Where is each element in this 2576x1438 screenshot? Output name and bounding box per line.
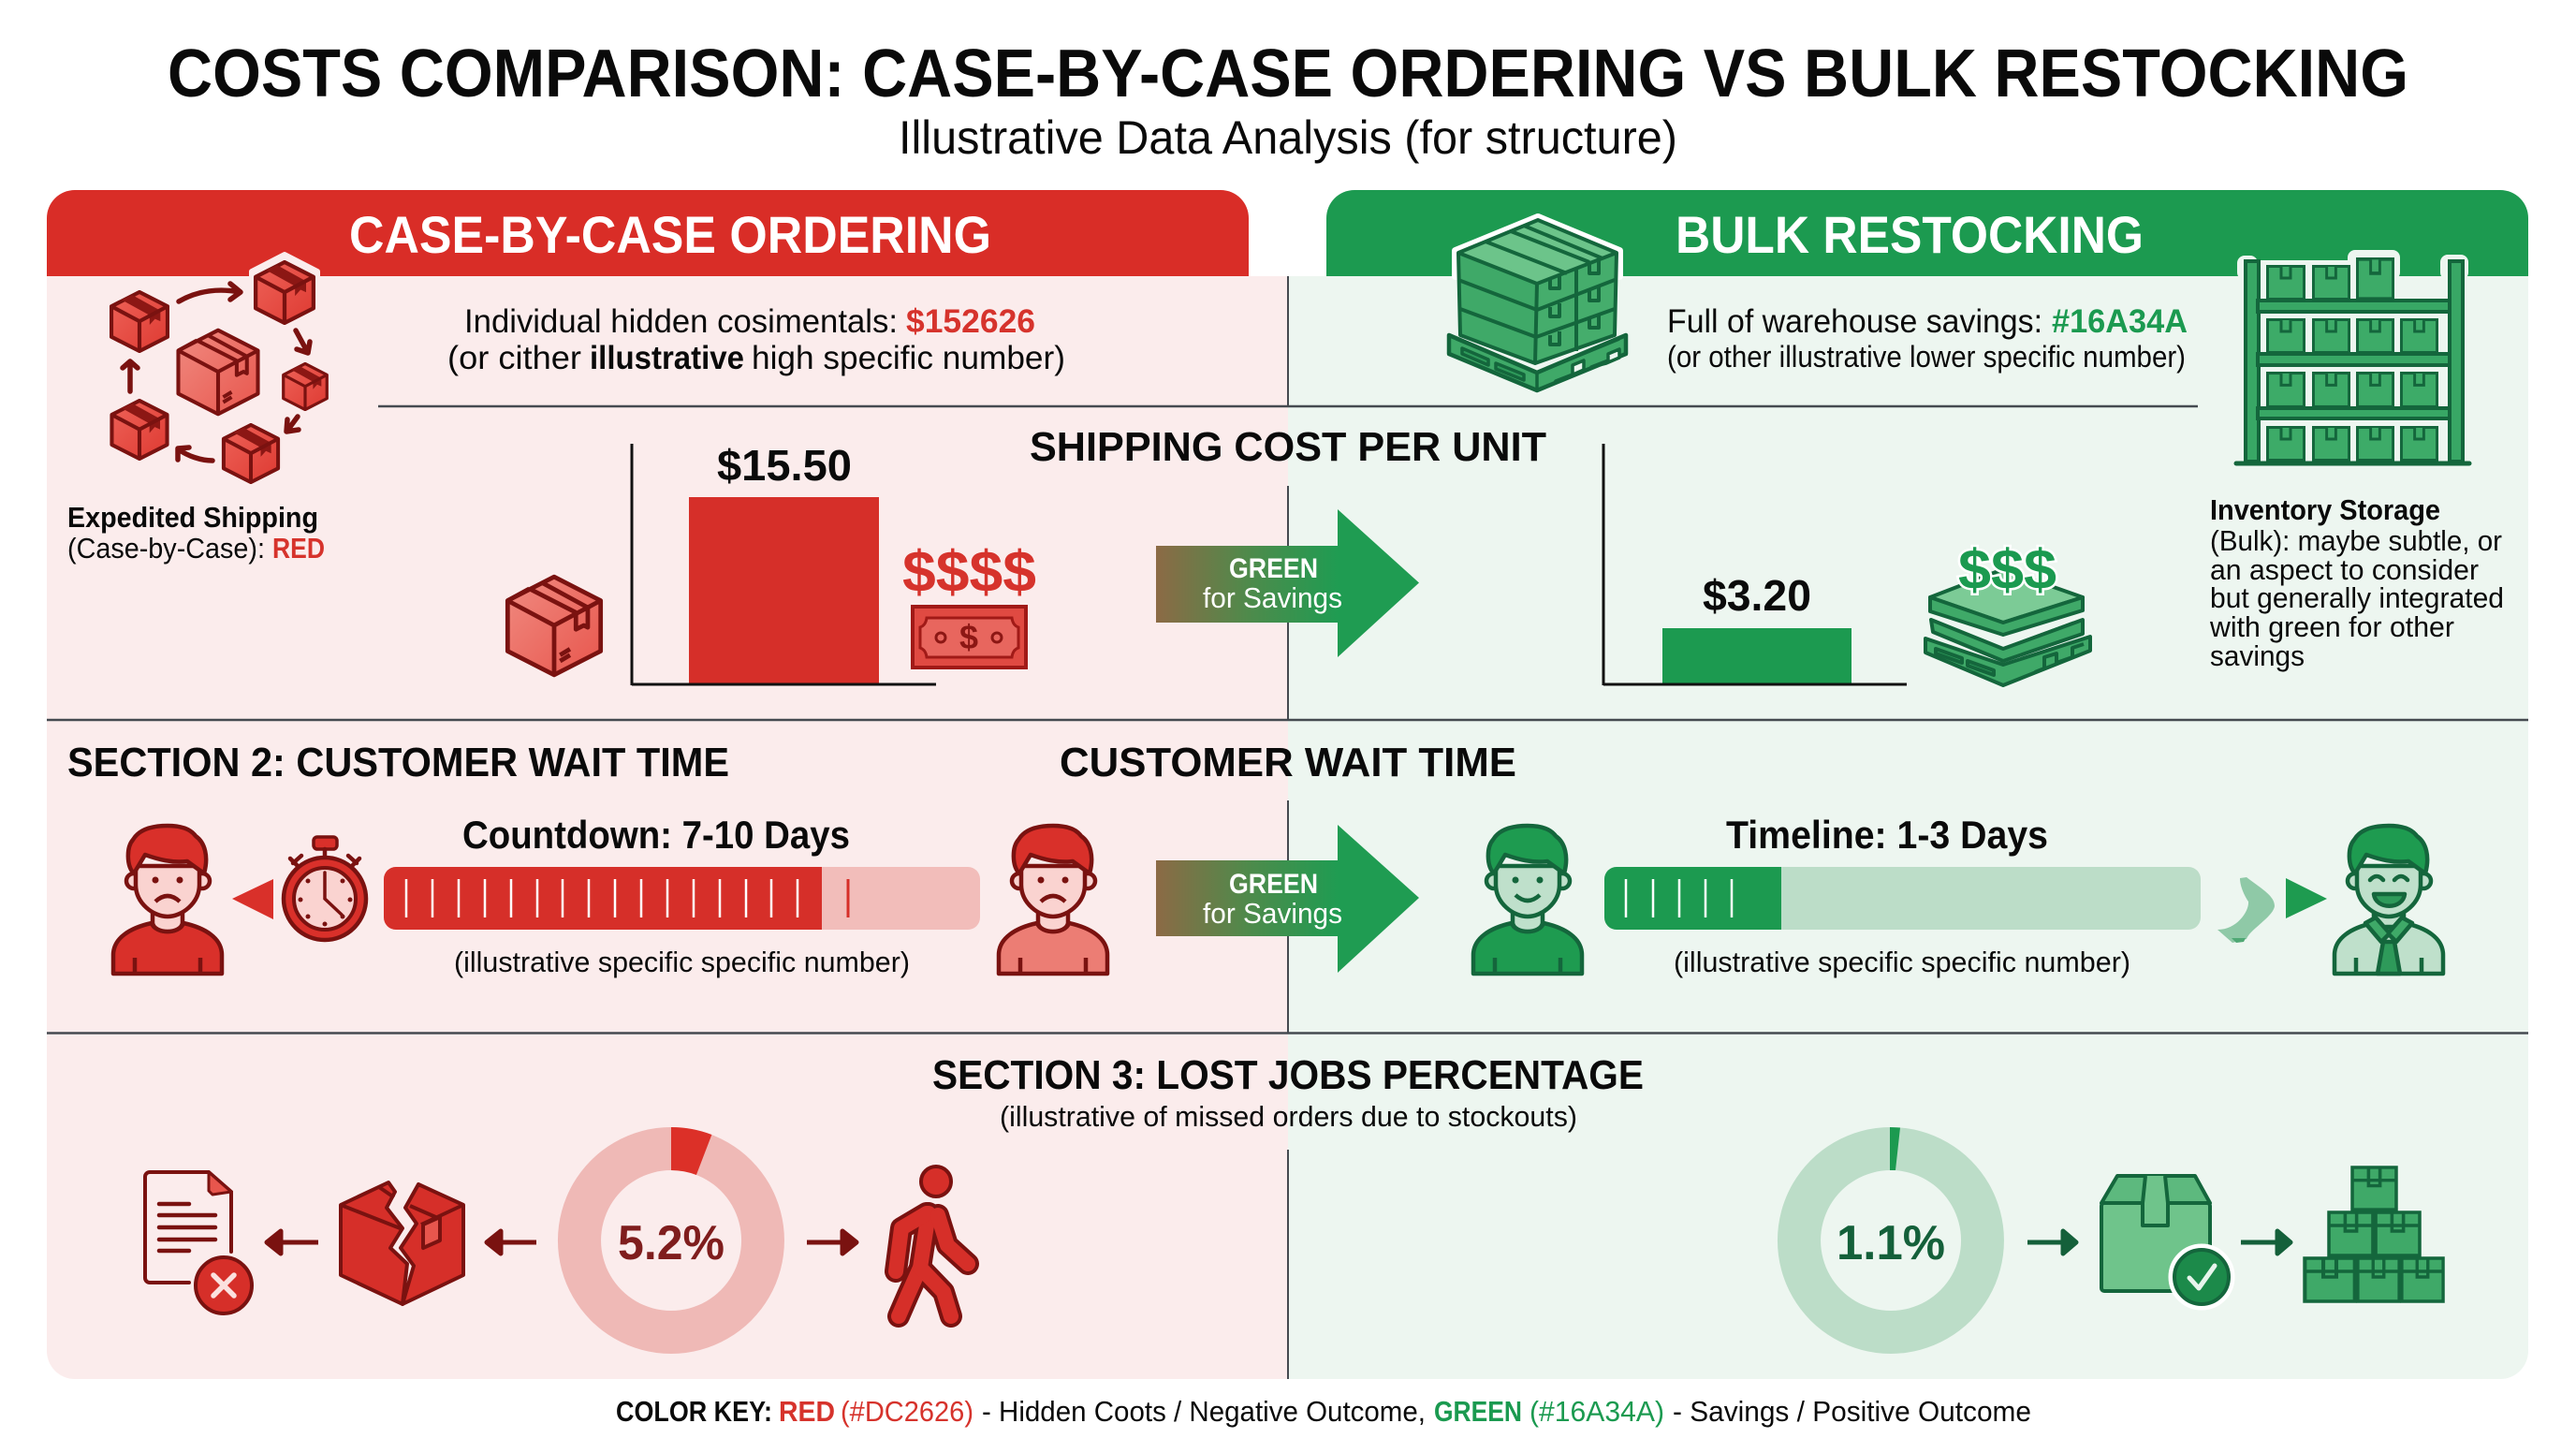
legend: color key: - Hidden Coots / Negative Outcome,: [982, 1395, 1426, 1428]
icon: banknote: $: [959, 618, 978, 656]
arrow: green for savings, shipping: GREEN: [1229, 553, 1318, 584]
arrow: left: [487, 1231, 536, 1254]
icon: stacked boxes: [2305, 1167, 2443, 1301]
legend: color key: (#16A34A): [1530, 1395, 1664, 1428]
text: inventory storage note: but generally integrated: [2210, 581, 2504, 614]
icon: pointer triangle: [2286, 878, 2327, 918]
heading: section 3: SECTION 3: LOST JOBS PERCENTAGE: [932, 1052, 1644, 1098]
legend: color key: COLOR KEY:: [616, 1395, 772, 1428]
icon: single shipping box: [507, 577, 601, 675]
text: hidden cost note: illustrative: [590, 340, 744, 376]
icon: high cost dollar signs: $$$$: [902, 540, 1036, 605]
text: inventory storage note: (Bulk): maybe subtle, or: [2210, 524, 2502, 557]
icon: walking customer: [896, 1167, 968, 1316]
arrow: green for savings, shipping: [1156, 509, 1419, 657]
arrow: green for savings, wait time: GREEN: [1229, 869, 1318, 900]
text: inventory storage note: an aspect to consider: [2210, 553, 2479, 586]
text: countdown label: Countdown: 7-10 Days: [462, 813, 850, 857]
arrow: left: [267, 1231, 318, 1254]
icon: delivered box with check: [2101, 1176, 2232, 1308]
icon: broken box: [341, 1182, 463, 1304]
text: hidden cost note: high specific number): [752, 340, 1065, 376]
arrow: green for savings, shipping: for Savings: [1203, 581, 1342, 614]
text: inventory storage note: with green for other: [2209, 610, 2454, 643]
arrow: green for savings, wait time: for Savings: [1203, 897, 1342, 930]
progress bar: 1-3 days: [1604, 867, 2201, 930]
subtitle: Illustrative Data Analysis (for structure): [899, 111, 1677, 164]
icon: warehouse shelf of boxes: [2236, 250, 2469, 463]
text: expedited shipping label: RED: [272, 532, 325, 565]
donut chart: 1.1% lost jobs: 1.1%: [1837, 1216, 1945, 1270]
text: inventory storage note: [2209, 493, 2504, 672]
icon: cancelled order document: [145, 1172, 252, 1313]
title: COSTS COMPARISON: CASE-BY-CASE ORDERING VS BULK RESTOCKING: [168, 37, 2408, 111]
text: countdown note: (illustrative specific specific number): [454, 946, 910, 978]
heading: customer wait time: CUSTOMER WAIT TIME: [1060, 740, 1516, 785]
icon: faded swoosh: [2217, 877, 2275, 943]
text: hidden cost note: $152626: [906, 303, 1035, 340]
icon: low cost dollar signs: $$$: [1958, 538, 2056, 601]
legend: color key: GREEN: [1434, 1395, 1522, 1428]
panel header: bulk restocking: [1326, 190, 2528, 276]
panel: case-by-case background: [47, 276, 1288, 1379]
donut chart: 1.1% lost jobs: [1778, 1127, 2004, 1354]
text: hidden cost note: (or cither: [447, 340, 581, 376]
text: section 3 note: (illustrative of missed orders due to stockouts): [1000, 1100, 1577, 1133]
text: timeline note: (illustrative specific specific number): [1674, 946, 2130, 978]
bar chart: case-by-case shipping cost: [632, 441, 936, 685]
panel header: bulk restocking: BULK RESTOCKING: [1676, 205, 2144, 264]
text: warehouse savings note: Full of warehouse savings:: [1667, 303, 2042, 340]
icon: loaded pallet of boxes: [1449, 217, 1626, 390]
donut chart: 5.2% lost jobs: 5.2%: [618, 1216, 724, 1270]
text: warehouse savings note: #16A34A: [2052, 303, 2188, 340]
icon: circular case-by-case box cycle: [111, 255, 327, 482]
text: inventory storage note: Inventory Storage: [2210, 493, 2440, 526]
legend: color key: RED: [779, 1395, 835, 1428]
bar chart: bulk shipping cost: [1603, 444, 1907, 685]
progress bar: 7-10 days: [384, 867, 980, 930]
text: expedited shipping label: [67, 501, 325, 565]
donut chart: 5.2% lost jobs: [558, 1127, 784, 1354]
icon: stacked pallets: [1925, 569, 2090, 685]
icon: banknote: [913, 607, 1026, 668]
bar chart: bulk shipping cost: $3.20: [1703, 571, 1811, 620]
legend: color key: - Savings / Positive Outcome: [1673, 1395, 2031, 1428]
icon: unhappy customer: [999, 826, 1107, 974]
text: inventory storage note: savings: [2210, 639, 2305, 672]
text: hidden cost note: Individual hidden cosimentals:: [464, 303, 898, 340]
text: expedited shipping label: Expedited Shipping: [67, 501, 318, 534]
text: expedited shipping label: (Case-by-Case):: [67, 532, 265, 565]
text: warehouse savings note: (or other illustrative lower specific number): [1667, 340, 2186, 374]
icon: frustrated customer: [113, 826, 222, 974]
panel header: case-by-case ordering: [47, 190, 1249, 276]
text: timeline label: Timeline: 1-3 Days: [1726, 813, 2048, 857]
arrow: right: [2241, 1231, 2291, 1254]
panel header: case-by-case ordering: CASE-BY-CASE ORDERING: [349, 205, 991, 264]
legend: color key: [616, 1395, 2031, 1428]
text: hidden cost note: [447, 303, 1065, 376]
icon: pointer triangle: [232, 879, 273, 919]
panel: bulk background: [1288, 276, 2528, 1379]
icon: delighted customer: [2334, 826, 2443, 974]
legend: color key: (#DC2626): [841, 1395, 973, 1428]
arrow: green for savings, wait time: [1156, 825, 1419, 973]
heading: section 2: SECTION 2: CUSTOMER WAIT TIME: [67, 740, 729, 785]
icon: stopwatch: [284, 837, 366, 940]
arrow: right: [2027, 1231, 2076, 1254]
arrow: right: [807, 1231, 856, 1254]
icon: smiling customer: [1473, 826, 1582, 974]
heading: shipping cost per unit: SHIPPING COST PER UNIT: [1030, 424, 1546, 470]
text: warehouse savings note: [1667, 303, 2188, 374]
bar chart: case-by-case shipping cost: $15.50: [717, 441, 852, 490]
